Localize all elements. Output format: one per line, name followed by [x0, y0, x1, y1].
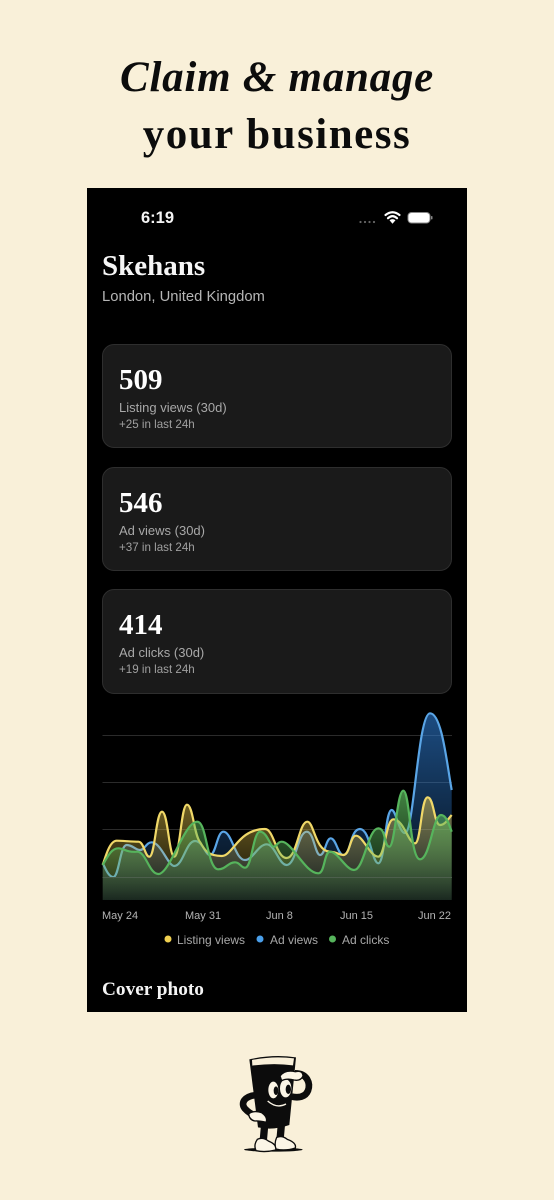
- status bar time: 6:19: [141, 209, 174, 227]
- glass body: [249, 1056, 296, 1129]
- status bar icons: [360, 211, 432, 224]
- panel: phone screen: [87, 188, 467, 1012]
- card: ad clicks: [102, 589, 452, 694]
- legend: Listing views: [177, 933, 245, 947]
- card: listing views: [102, 344, 452, 448]
- x axis labels: [102, 910, 451, 922]
- x axis labels: May 31: [185, 910, 221, 922]
- x axis labels: May 24: [102, 910, 138, 922]
- legs: [263, 1125, 281, 1140]
- x axis labels: Jun 15: [340, 910, 373, 922]
- shoes: [255, 1138, 276, 1152]
- legend: Ad clicks: [342, 933, 389, 947]
- legend: Ad views: [270, 933, 318, 947]
- series: ad views: [103, 713, 452, 900]
- icon: pint glass mascot: [240, 1056, 312, 1152]
- card: ad views: 546: [119, 487, 162, 519]
- card: listing views: +25 in last 24h: [119, 418, 195, 431]
- title: [120, 54, 434, 158]
- card: listing views: 509: [119, 364, 162, 396]
- card: ad clicks: +19 in last 24h: [119, 663, 195, 676]
- waist hand: [249, 1112, 267, 1122]
- card: ad clicks: 414: [119, 609, 162, 641]
- card: ad views: [102, 467, 452, 571]
- business name: Skehans: [102, 250, 205, 282]
- title: your business: [143, 111, 411, 158]
- line chart: [102, 712, 453, 947]
- title: Claim & manage: [120, 54, 434, 101]
- card: listing views: Listing views (30d): [119, 400, 227, 415]
- section heading: cover photo: Cover photo: [102, 979, 204, 1000]
- x axis labels: Jun 22: [418, 910, 451, 922]
- eyes: [268, 1082, 278, 1098]
- card: ad views: Ad views (30d): [119, 523, 205, 538]
- x axis labels: Jun 8: [266, 910, 293, 922]
- foam: [252, 1057, 294, 1066]
- location: London, United Kingdom: [102, 289, 265, 305]
- raised hand: [280, 1071, 303, 1081]
- shadow: [244, 1148, 303, 1152]
- legend: [164, 933, 389, 947]
- card: ad views: +37 in last 24h: [119, 541, 195, 554]
- series: ad clicks: [103, 791, 452, 900]
- series: listing views: [103, 797, 452, 900]
- card: ad clicks: Ad clicks (30d): [119, 645, 204, 660]
- smile: [268, 1101, 286, 1106]
- left arm: [243, 1095, 257, 1116]
- right arm: [292, 1073, 309, 1097]
